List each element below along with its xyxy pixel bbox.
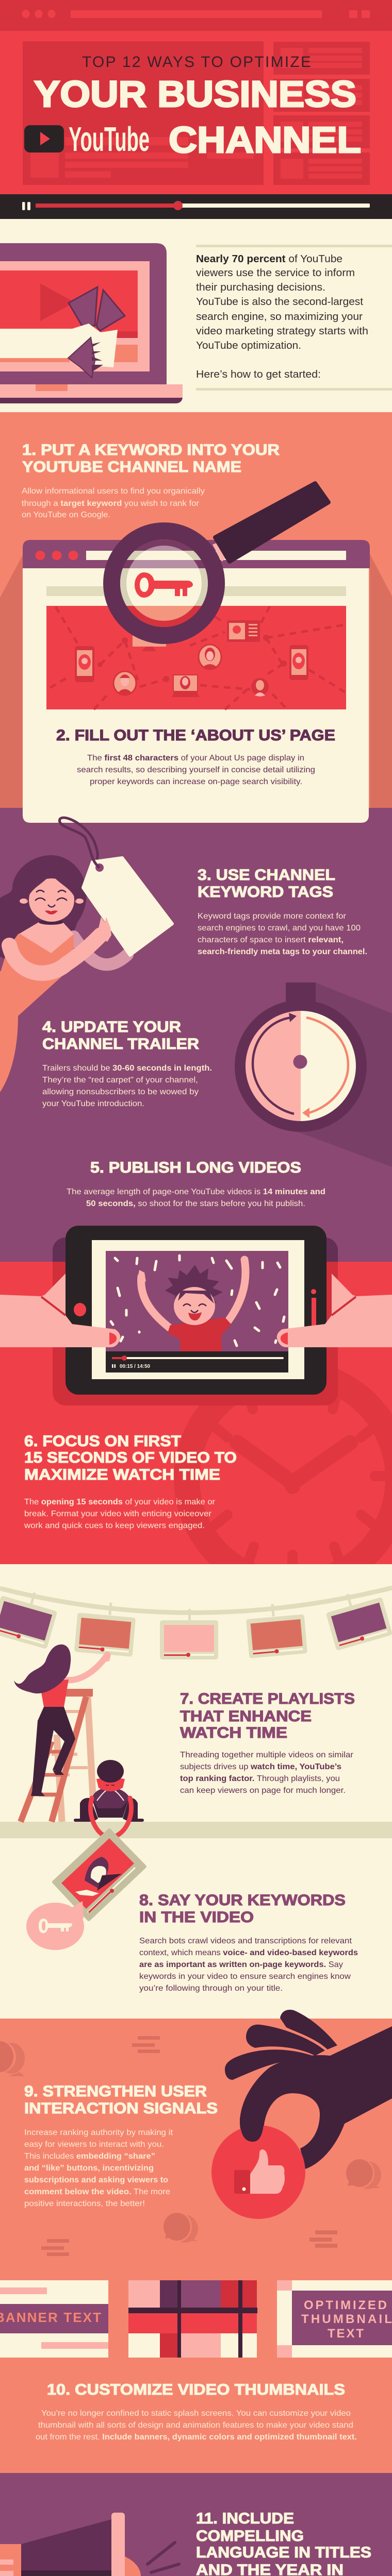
text block: step 5: 50 seconds, so shoot for the stars before you hit publish. (86, 1199, 305, 1208)
text block: intro copy: Here’s how to get started: (196, 368, 321, 380)
text block: intro copy: video marketing strategy starts with (196, 325, 368, 337)
illustration: tablet playing a long video (66, 1226, 326, 1395)
panel: intro background (0, 219, 392, 412)
text block: step 4: allowing nonsubscribers to be wowed by (42, 1088, 199, 1096)
text block: step 8: are as important as written on-page keywords. Say (139, 1960, 343, 1969)
text block: step 6: The opening 15 seconds of your video is make or (24, 1498, 216, 1506)
illustration: trailer stopwatch (235, 982, 392, 1167)
icon: confetti (111, 1256, 284, 1346)
icon: chat bubble centre (162, 2211, 198, 2243)
icon: profile card (227, 620, 260, 642)
illustration: magnifying glass over key (103, 483, 329, 644)
heading: step 3: 3. USE CHANNEL (198, 867, 335, 884)
illustration: clock watermark (187, 1373, 392, 1584)
icon: keyword tag (59, 818, 172, 955)
text block: step 1: on YouTube on Google. (22, 511, 110, 519)
icon: desktop monitor (133, 618, 166, 651)
heading: step 1: 1. PUT A KEYWORD INTO YOUR (22, 442, 280, 459)
illustration: woman on ladder (14, 1645, 111, 1796)
control: video progress bar: 00:15 / 14:50 (120, 1363, 150, 1369)
heading: step 11: 11. INCLUDE (196, 2510, 294, 2527)
text block: step 8: keywords in your video to ensure search engines know (139, 1972, 351, 1981)
heading: step 7 (180, 1690, 355, 1741)
heading: step 9 (24, 2083, 218, 2117)
icon: portrait man (113, 671, 136, 695)
card: playlist video 4 (245, 1601, 307, 1658)
text block: intro copy: their purchasing decisions. (196, 281, 325, 293)
illustration: playlist garland (0, 1584, 392, 1659)
text block: step 9: positive interactions, the better! (24, 2199, 145, 2208)
text block: step 9: This includes embedding “share” (24, 2152, 155, 2161)
heading: step 11: COMPELLING (196, 2528, 304, 2545)
text block: step 9: and “like” buttons, incentivizing (24, 2164, 154, 2173)
icon: fist holding money (0, 324, 118, 378)
text block: intro copy (196, 253, 368, 380)
icon: chat bubble left (0, 2041, 25, 2076)
illustration: optimized text thumbnail: TEXT (328, 2327, 364, 2341)
heading: step 9: INTERACTION SIGNALS (24, 2100, 218, 2117)
text block: step 3 (198, 912, 367, 956)
heading: step 6: 15 SECONDS OF VIDEO TO (24, 1449, 237, 1466)
text block: step 10: thumbnail with all sorts of design and animation features to make your video stand (38, 2421, 353, 2430)
heading: step 8: IN THE VIDEO (139, 1909, 254, 1926)
chart: audience network illustration (50, 606, 346, 709)
card: playlist video 2 (74, 1600, 137, 1657)
heading: step 7: THAT ENHANCE (180, 1708, 312, 1725)
text block: step 8: Search bots crawl videos and transcriptions for relevant (139, 1937, 352, 1945)
text block: step 2: search results, so describing yourself in concise detail utilizing (77, 766, 315, 774)
control: video progress bar (112, 1355, 284, 1369)
callout: speech bubble with key (26, 1901, 84, 1950)
icon: tilted video frame (54, 1830, 145, 1920)
icon: tablet buttons (74, 1289, 316, 1326)
title: your business: YOUR BUSINESS (34, 74, 356, 115)
heading: step 7: 7. CREATE PLAYLISTS (180, 1690, 355, 1707)
illustration: megaphone (0, 2513, 179, 2576)
text block: step 3: search-friendly meta tags to your channel. (198, 947, 367, 956)
text block: step 4: They’re the “red carpet” of your channel, (42, 1076, 198, 1084)
panel: browser window for steps 1 and 2 (23, 540, 370, 823)
heading: step 7: WATCH TIME (180, 1724, 287, 1741)
heading: step 5: 5. PUBLISH LONG VIDEOS (90, 1159, 301, 1176)
illustration: cheering child (138, 1257, 249, 1351)
heading: step 1 (22, 442, 280, 476)
text block: step 3: search engines to crawl, and you have 100 (198, 924, 361, 933)
text block: intro copy: YouTube optimization. (196, 340, 301, 351)
icon: YouTube logo: YouTube (69, 120, 150, 159)
illustration: hand picking like button (211, 2010, 392, 2219)
illustration: ladder (21, 1689, 93, 1822)
icon: portrait glasses (251, 678, 269, 697)
heading: step 11 (196, 2510, 371, 2576)
heading: step 1: YOUTUBE CHANNEL NAME (22, 459, 241, 476)
icon: banknotes top (69, 287, 125, 331)
text block: step 1: Allow informational users to find you organically (22, 487, 205, 496)
heading: step 4: CHANNEL TRAILER (42, 1036, 199, 1053)
text block: step 7: subjects drives up watch time, YouTube’s (180, 1762, 341, 1771)
icon: YouTube logo (24, 120, 150, 159)
text block: step 8: context, which means voice- and video-based keywords (139, 1948, 358, 1957)
heading: step 8 (139, 1892, 346, 1926)
text block: step 4 (42, 1064, 212, 1108)
text block: step 9: Increase ranking authority by making it (24, 2128, 173, 2137)
panel: header browser mock-up (0, 0, 392, 194)
icon: key (135, 572, 193, 598)
icon: phone left (75, 646, 94, 682)
heading: step 3 (198, 867, 335, 901)
panel: sections 9 and 10 background (0, 2019, 392, 2473)
text block: intro copy: search engine, so maximizing your (196, 311, 363, 323)
panel: shelf band (0, 1822, 392, 1838)
text block: intro copy: viewers use the service to inform (196, 267, 355, 279)
rule: intro top (196, 245, 392, 247)
illustration: optimized text thumbnail: OPTIMIZED (304, 2298, 387, 2312)
text block: step 4: your YouTube introduction. (42, 1099, 144, 1108)
panel: section 6 background (0, 1262, 392, 1564)
text block: step 2: proper keywords can increase on-page search visibility. (90, 777, 302, 786)
text block: step 6: work and quick cues to keep viewers engaged. (24, 1521, 205, 1530)
text block: step 6: break. Format your video with enticing voiceover (24, 1510, 212, 1518)
panel: video control bar (0, 194, 392, 219)
text block: intro copy: YouTube is also the second-largest (196, 296, 363, 308)
text block: step 7: top ranking factor. Through playlists, you (180, 1774, 340, 1783)
illustration: banner thumbnail (0, 2280, 108, 2358)
text block: step 3: Keyword tags provide more context for (198, 912, 347, 921)
title: channel: CHANNEL (169, 120, 361, 161)
text block: step 5: The average length of page-one YouTube videos is 14 minutes and (67, 1188, 325, 1196)
text block: step 10: You’re no longer confined to static splash screens. You can customize your video (41, 2409, 351, 2418)
heading: step 6: 6. FOCUS ON FIRST (24, 1433, 181, 1450)
text block: step 6 (24, 1498, 216, 1530)
illustration: laptop with money (0, 243, 183, 403)
rule: intro bottom (196, 388, 392, 391)
text block: step 7: can keep viewers on page for much longer. (180, 1786, 346, 1795)
icon: thumbs up (234, 2149, 285, 2194)
illustration: tablet shadow (53, 1238, 338, 1405)
text block: step 9: subscriptions and asking viewers to (24, 2176, 168, 2184)
heading: step 4 (42, 1019, 199, 1053)
panel: sections 3 to 5 background (0, 808, 392, 1262)
text block: step 2: The first 48 characters of your About Us page display in (87, 754, 304, 762)
heading: step 4: 4. UPDATE YOUR (42, 1019, 181, 1036)
icon: laptop (172, 675, 200, 697)
text block: step 10: out from the rest. Include banners, dynamic colors and optimized thumbnail text. (36, 2433, 357, 2442)
text block: step 2 (77, 754, 315, 786)
text block: step 7 (180, 1751, 354, 1795)
text block: step 1 (22, 487, 205, 519)
icon: phone right (289, 645, 308, 680)
text block: step 9: comment below the video. The more (24, 2188, 170, 2196)
text block: step 10 (36, 2409, 357, 2442)
illustration: right hand (277, 1274, 392, 1347)
heading: step 9: 9. STRENGTHEN USER (24, 2083, 207, 2100)
panel: sections 7 and 8 background (0, 1564, 392, 2019)
card: playlist video 5 (322, 1585, 392, 1651)
illustration: optimized text thumbnail: THUMBNAIL (301, 2312, 392, 2326)
text block: step 3: characters of space to insert relevant, (198, 936, 344, 944)
text block: step 9: easy for viewers to interact with you. (24, 2140, 164, 2149)
heading: step 10: 10. CUSTOMIZE VIDEO THUMBNAILS (47, 2381, 345, 2398)
panel: section 1 and 2 background (0, 412, 392, 808)
illustration: optimized text thumbnail (277, 2280, 392, 2358)
text block: step 8: you’re following through on your title. (139, 1984, 283, 1993)
card: playlist video 3 (160, 1609, 218, 1659)
heading: step 2: 2. FILL OUT THE ‘ABOUT US’ PAGE (56, 727, 335, 744)
heading: step 3: KEYWORD TAGS (198, 884, 333, 901)
icon: chat bubble right (345, 2158, 381, 2189)
decoration: comment bars and speech bubbles (0, 2036, 381, 2256)
text block: step 4: Trailers should be 30-60 seconds in length. (42, 1064, 212, 1073)
illustration: woman holding keyword tag (0, 818, 172, 1092)
text block: step 5 (67, 1188, 325, 1208)
text block: step 7: Threading together multiple videos on similar (180, 1751, 354, 1759)
text block: intro copy: Nearly 70 percent of YouTube (196, 253, 342, 265)
text block: step 9 (24, 2128, 173, 2208)
heading: step 11: LANGUAGE IN TITLES (196, 2544, 371, 2561)
text block: step 1: through a target keyword you wish to rank for (22, 499, 200, 508)
title: subtitle line: TOP 12 WAYS TO OPTIMIZE (82, 54, 311, 71)
icon: portrait woman (199, 645, 221, 669)
heading: step 6: MAXIMIZE WATCH TIME (24, 1466, 220, 1483)
illustration: left hand (0, 1274, 120, 1347)
illustration: colour block thumbnail (128, 2280, 257, 2358)
illustration: boy on shelf dangling a video (26, 1760, 145, 1950)
text block: step 8 (139, 1937, 358, 1993)
heading: step 8: 8. SAY YOUR KEYWORDS (139, 1892, 346, 1909)
heading: step 6 (24, 1433, 237, 1483)
card: playlist video 1 (0, 1584, 61, 1649)
panel: sections 11 and 12 background (0, 2473, 392, 2576)
